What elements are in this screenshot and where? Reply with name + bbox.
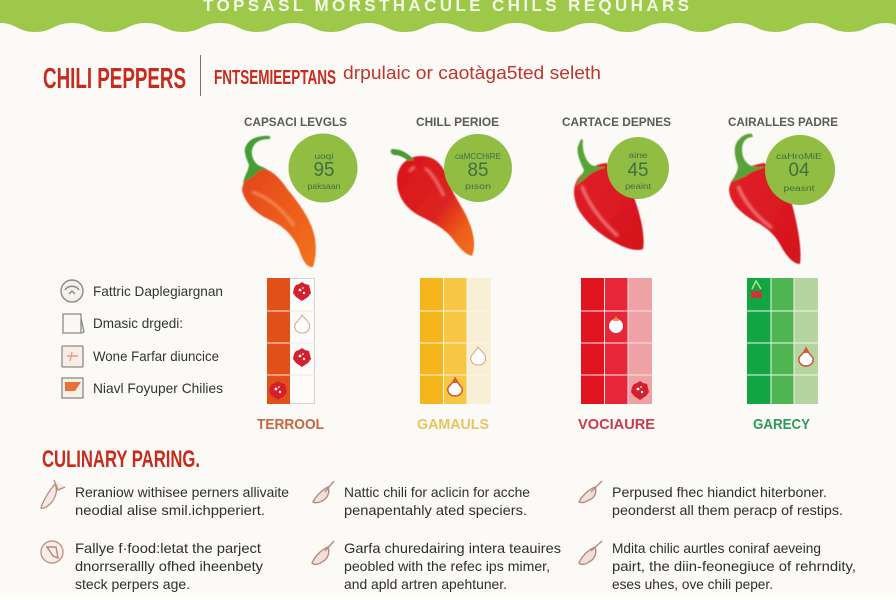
pairing item 6 xyxy=(579,540,856,592)
pairing item 4: Garfa churedairing intera teauires xyxy=(344,540,561,556)
legend item: dmasic xyxy=(63,314,183,333)
heat markers xyxy=(751,281,813,366)
legend xyxy=(61,280,223,398)
heat markers xyxy=(609,316,649,400)
pepper 2 with badge xyxy=(391,134,512,256)
capsaicin badge xyxy=(765,135,835,205)
legend item: dmasic: Dmasic drgedi: xyxy=(93,315,183,331)
legend item: fabric: Fattric Daplegiargnan xyxy=(93,283,223,299)
legend item: niavl: Niavl Foyuper Chilies xyxy=(93,380,223,396)
pairing item 2: Fallye f·food:letat the parject xyxy=(75,540,261,556)
pairing item 4: peobled with the refec ips mimer, xyxy=(344,558,550,574)
pepper 4 with badge xyxy=(729,134,835,264)
capsaicin badge: caHroMiE xyxy=(776,152,822,161)
page heading xyxy=(43,55,601,96)
pairing item 4 xyxy=(312,540,561,592)
chart label: vociaure: VOCIAURE xyxy=(578,416,655,433)
heat chart 1: terrool xyxy=(267,278,315,404)
legend item: niavl xyxy=(62,378,223,398)
capsaicin badge: 95 xyxy=(314,159,334,181)
capsaicin badge: uoqi xyxy=(314,152,334,161)
pairing item 2: dnorrserallly ofhed iheenbety xyxy=(75,558,263,574)
legend item: fabric xyxy=(61,280,223,302)
heat chart 2: gamauls xyxy=(420,278,491,404)
pairing item 3: Nattic chili for aclicin for acche xyxy=(344,484,530,500)
legend item: wone xyxy=(62,346,219,367)
pepper illustration xyxy=(242,136,316,267)
capsaicin badge: paksaan xyxy=(308,182,340,191)
page heading: CHILI PEPPERS xyxy=(43,63,186,95)
pepper 1 with badge xyxy=(242,134,358,267)
header banner xyxy=(0,0,896,32)
pepper illustration xyxy=(391,149,474,256)
capsaicin badge: peasnt xyxy=(784,184,815,193)
pairing item 5 xyxy=(579,481,843,518)
chart label: terrool: TERROOL xyxy=(257,416,324,433)
heat markers xyxy=(448,347,486,396)
column headings: CARTACE DEPNES xyxy=(562,115,671,129)
subtitle xyxy=(214,63,601,89)
heat chart 3: vociaure xyxy=(581,278,652,404)
pepper 3 with badge xyxy=(574,137,669,250)
pairing item 6: pairt, the diin-feonegiuce of rehrndity, xyxy=(612,558,856,574)
capsaicin badge: 45 xyxy=(628,160,648,181)
capsaicin badge: pıson xyxy=(465,182,491,191)
pairing item 4: and apld artren apehtuner. xyxy=(344,576,507,592)
pairing column 1 xyxy=(41,480,289,592)
chart label: gamauls: GAMAULS xyxy=(417,416,489,433)
capsaicin badge: 85 xyxy=(468,160,488,181)
pairing item 6: Mdita chilic aurtles coniraf aeveing xyxy=(612,540,821,556)
capsaicin badge xyxy=(444,134,512,202)
pairing column 2 xyxy=(312,481,561,592)
column headings: CAPSACI LEVGLS xyxy=(244,115,347,129)
capsaicin badge: caMCCHiRE xyxy=(455,152,501,161)
column headings xyxy=(244,115,838,129)
capsaicin badge xyxy=(288,134,358,202)
pairing item 5: Perpused fhec hiandict hiterboner. xyxy=(612,484,827,500)
heat markers xyxy=(269,282,311,400)
pairing item 2: steck perpers age. xyxy=(75,576,190,592)
pepper illustration xyxy=(574,139,644,250)
subtitle: drpulaic or caotàga5ted seleth xyxy=(343,63,601,83)
pairing column 3 xyxy=(579,481,856,592)
pairing item 1 xyxy=(41,480,289,518)
capsaicin badge: peaint xyxy=(625,182,652,191)
capsaicin badge xyxy=(607,137,669,199)
pairing item 3 xyxy=(313,481,530,518)
column headings: CHILL PERIOE xyxy=(416,115,499,129)
pairing item 3: penapentahly ated speciers. xyxy=(344,502,527,518)
heat chart 4: garecy xyxy=(747,278,818,404)
column headings: CAIRALLES PADRE xyxy=(728,115,838,129)
capsaicin badge: aine xyxy=(628,151,648,160)
section heading: CULINARY PARING. xyxy=(42,446,200,473)
subtitle: FNTSEMIEEPTANS xyxy=(214,67,336,89)
pairing item 1: neodial alise smil.ichpperiert. xyxy=(75,502,265,518)
pairing item 2 xyxy=(41,540,263,592)
pairing item 1: Reraniow withisee perners allivaite xyxy=(75,484,289,500)
legend item: wone: Wone Farfar diuncice xyxy=(93,348,219,364)
capsaicin badge: 04 xyxy=(788,160,810,181)
pairing item 6: eses uhes, ove chili peper. xyxy=(612,576,773,592)
chart label: garecy: GARECY xyxy=(753,416,810,433)
pepper illustration xyxy=(729,134,801,264)
pairing item 5: peonderst all them peracp of restips. xyxy=(612,502,843,518)
